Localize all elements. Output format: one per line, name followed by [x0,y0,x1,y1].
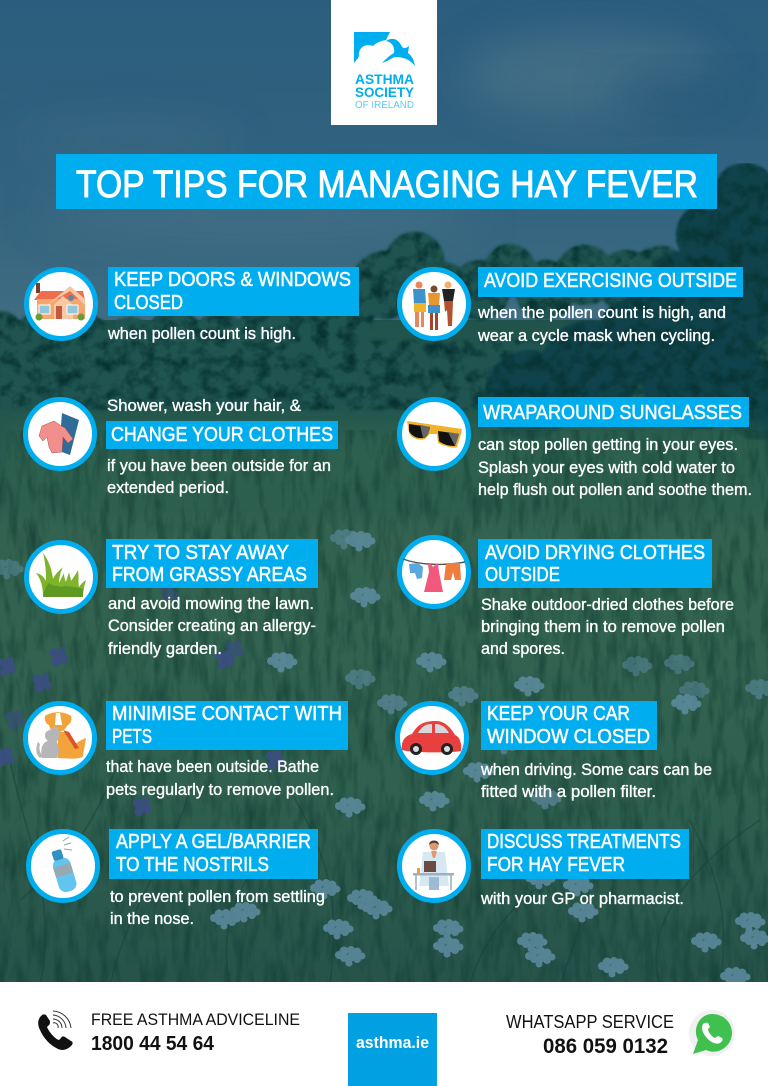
body text: help flush out pollen and soothe them. [478,481,752,499]
heading: CLOSED [114,292,183,314]
body text: when driving. Some cars can be [480,761,712,779]
adviceline text: 1800 44 54 64 [91,1033,215,1055]
icon: telephone [38,1011,73,1050]
body text: when pollen count is high. [107,325,296,343]
body text: Shake outdoor-dried clothes before [481,596,734,614]
adviceline text [91,1010,300,1055]
heading: DISCUSS TREATMENTS [487,831,681,853]
heading: CHANGE YOUR CLOTHES [111,424,333,446]
body text [108,595,316,658]
icon: house [26,270,96,338]
body text: to prevent pollen from settling [110,888,325,906]
body text: Consider creating an allergy- [108,617,316,635]
body text: can stop pollen getting in your eyes. [478,436,738,454]
tip: keep your car window closed [398,701,712,801]
body text: in the nose. [110,910,194,928]
logo wordmark: ASTHMA [355,71,414,87]
icon: grass [26,542,96,612]
body text: pets regularly to remove pollen. [106,781,334,799]
body text: with your GP or pharmacist. [480,890,684,908]
body text: when the pollen count is high, and [477,304,726,322]
heading: MINIMISE CONTACT WITH [112,703,342,725]
tip: wraparound sunglasses [400,397,752,499]
whatsapp text: 086 059 0132 [543,1035,668,1058]
icon: cloud and bird logo mark [354,32,415,66]
body text [106,758,334,799]
icon: three runners [400,270,468,338]
website box [348,1013,437,1086]
heading: AVOID DRYING CLOTHES [485,542,705,564]
heading: TRY TO STAY AWAY [112,542,289,564]
heading: FROM GRASSY AREAS [112,564,307,586]
body text: fitted with a pollen filter. [481,783,656,801]
footer panel [0,982,768,1086]
logo wordmark: SOCIETY [355,84,415,100]
tip: avoid drying clothes outside [400,538,734,658]
logo wordmark [355,71,415,111]
logo panel: Asthma Society of Ireland [331,0,437,125]
body text: if you have been outside for an [107,457,331,475]
heading: WINDOW CLOSED [487,726,650,748]
body text [480,761,712,801]
body text [481,596,734,658]
heading: FOR HAY FEVER [487,854,625,876]
body text: extended period. [107,479,229,497]
heading: OUTSIDE [485,564,560,586]
tip: change your clothes [26,397,338,497]
body text: friendly garden. [108,640,222,658]
body text: that have been outside. Bathe [106,758,319,776]
tip: keep doors and windows closed [26,267,359,343]
heading [481,829,689,879]
whatsapp text [506,1012,674,1058]
body text [478,436,752,499]
tip: avoid exercising outside [400,267,743,345]
icon: dog and cat [26,704,94,772]
adviceline text: FREE ASTHMA ADVICELINE [91,1010,300,1029]
intro text: Shower, wash your hair, & [107,397,301,415]
body text [477,304,726,345]
website box: asthma.ie [356,1033,429,1052]
heading [106,701,348,750]
icon: red car [398,704,466,772]
icon: sunglasses [400,400,468,468]
heading: TO THE NOSTRILS [116,854,269,876]
body text: wear a cycle mask when cycling. [477,327,715,345]
icon: clothes line [400,538,468,606]
heading [106,539,318,588]
title [56,154,717,209]
tip: apply a gel or barrier to the nostrils [28,829,325,928]
body text: Splash your eyes with cold water to [478,459,735,477]
tip: stay away from grassy areas [26,539,318,658]
heading: KEEP DOORS & WINDOWS [114,269,351,291]
title: TOP TIPS FOR MANAGING HAY FEVER [76,164,698,206]
heading [478,267,743,297]
body text [107,457,331,497]
heading: PETS [112,726,152,748]
body text [110,888,325,928]
body text: bringing them in to remove pollen [481,618,725,636]
tree line [0,163,768,440]
heading [478,397,749,427]
heading: APPLY A GEL/BARRIER [116,831,311,853]
icon: shirt and jeans [26,400,94,468]
body text: and spores. [481,640,565,658]
icon: doctor at desk [400,832,468,900]
heading: KEEP YOUR CAR [487,703,630,725]
heading [108,267,359,316]
heading: AVOID EXERCISING OUTSIDE [484,270,737,292]
heading [478,539,712,588]
heading [109,829,318,879]
body text: and avoid mowing the lawn. [108,595,314,613]
icon: nasal spray bottle [28,832,98,900]
tip: discuss treatments for hay fever [400,829,689,908]
icon: whatsapp [689,1010,735,1056]
heading [481,701,657,750]
heading: WRAPAROUND SUNGLASSES [483,402,742,424]
whatsapp text: WHATSAPP SERVICE [506,1012,674,1032]
tip: minimise contact with pets [26,701,348,799]
logo wordmark: OF IRELAND [355,100,414,111]
